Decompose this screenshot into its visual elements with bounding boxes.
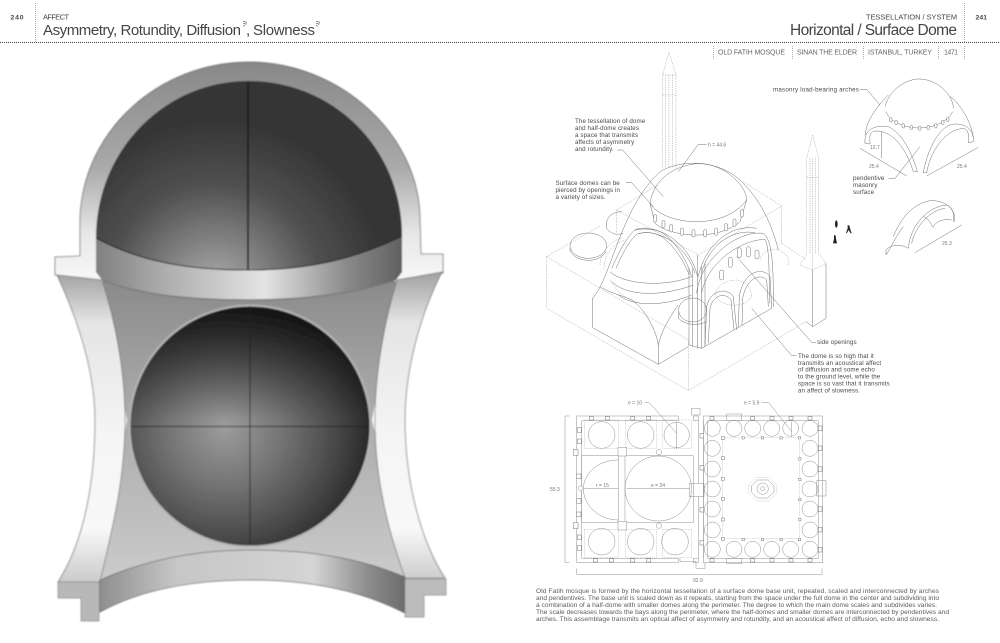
leader lines xyxy=(617,144,816,356)
lower band xyxy=(100,550,405,613)
left hall bays xyxy=(584,420,692,558)
human figures xyxy=(833,220,852,243)
illustration: dome base unit xyxy=(860,79,978,255)
body paragraph: a combination of a half-dome with smaller domes along the perimeter. The degree to which the main dome scales and subdivides varies. xyxy=(536,602,937,609)
page header xyxy=(0,3,1000,60)
building metadata row: ISTANBUL, TURKEY xyxy=(868,50,932,56)
building metadata row: OLD FATIH MOSQUE xyxy=(718,50,785,56)
annotation: tessellation: and rotundity. xyxy=(575,146,614,153)
annotation: surface domes: pierced by openings in xyxy=(556,187,620,194)
body paragraph xyxy=(536,588,949,623)
annotation: tessellation: a space that transmits xyxy=(575,132,638,139)
half dome interior xyxy=(96,81,402,270)
body paragraph: The scale decreases towards the bays along the perimeter, where the half-domes and smaller domes are interconnected by pendentives and xyxy=(536,609,949,616)
left section label: AFFECT xyxy=(43,12,69,22)
base block dashed outline xyxy=(547,182,807,391)
half dome seam xyxy=(247,81,249,270)
courtyard outline xyxy=(722,438,799,538)
central dome and half dome xyxy=(578,422,692,530)
right title: Horizontal / Surface Dome xyxy=(790,22,957,39)
main dome and drum xyxy=(650,163,747,237)
dimensions: base unit xyxy=(869,145,967,247)
right foot xyxy=(405,579,446,617)
dimensions: floor plan: r = 15 xyxy=(596,483,609,489)
annotation: pendentive surface: masonry xyxy=(853,182,878,189)
annotation: surface domes: Surface domes can be xyxy=(556,180,620,187)
small perimeter domes xyxy=(570,212,789,324)
dimensions: floor plan: 55.3 xyxy=(550,487,560,493)
annotation: side openings: side openings xyxy=(817,339,857,346)
courtyard domes xyxy=(704,420,818,557)
left hall domes xyxy=(588,422,689,555)
right pier xyxy=(375,272,445,578)
central dome circle xyxy=(130,306,370,546)
right section label: TESSELLATION / SYSTEM xyxy=(866,12,957,22)
annotation: acoustics: The dome is so high that it xyxy=(798,353,874,360)
annotation: tessellation: affects of asymmetry xyxy=(575,139,635,146)
right minaret xyxy=(800,135,826,327)
supporting arches xyxy=(865,95,973,173)
half dome base band xyxy=(96,236,402,300)
dimensions: floor plan: e = 10 xyxy=(628,400,642,406)
dimensions: base unit: 25.4 xyxy=(957,164,967,170)
annotation: acoustics: to the ground level, while the xyxy=(798,374,881,380)
dome xyxy=(885,79,953,128)
dimensions: floor plan: e = 24 xyxy=(651,483,665,489)
dimensions: floor plan: 92.9 xyxy=(693,578,703,584)
ground plane lines xyxy=(860,89,978,178)
illustration: axonometric drawing of the mosque xyxy=(547,52,852,391)
annotation: acoustics: an affect of slowness. xyxy=(798,388,860,394)
columns xyxy=(573,417,822,562)
pendentive surface xyxy=(100,278,408,578)
upper arch frame xyxy=(55,62,443,282)
left title: Asymmetry, Rotundity, Diffusion xyxy=(43,22,241,39)
annotation: acoustics: space is so vast that it transmits xyxy=(798,380,890,388)
right wing with side arches xyxy=(697,233,773,345)
annotation: tessellation: and half-dome creates xyxy=(575,125,639,132)
dimensions: floor plan: e = 5.9 xyxy=(744,400,760,406)
dimensions: floor plan xyxy=(550,400,760,584)
dimensions: base unit: 12.7 xyxy=(870,145,880,151)
left page number: 240 xyxy=(10,14,24,22)
left title: , xyxy=(246,22,250,39)
drum windows xyxy=(890,117,949,130)
annotation: acoustics: transmits an acoustical affect xyxy=(798,360,881,367)
annotation: pendentive surface: pendentive xyxy=(853,175,885,182)
body paragraph: arches. This assemblage transmits an optical affect of asymmetry and rotundity, and an acoustical affect of diffusion, echo and slowness. xyxy=(536,616,939,623)
left foot xyxy=(58,582,99,621)
right page number: 241 xyxy=(976,14,987,22)
body paragraph: and pendentives. The base unit is scaled down as it repeats, starting from the space under the full dome in the center and subdividing into xyxy=(536,595,939,602)
left title xyxy=(43,21,320,39)
building metadata row: 1471 xyxy=(944,50,958,56)
courtyard fountain xyxy=(749,477,777,501)
central pier lines xyxy=(689,255,772,348)
illustration: rendered dome unit interior view xyxy=(55,62,446,621)
body paragraph: Old Fatih mosque is formed by the horizontal tessellation of a surface dome base unit, repeated, scaled and interconnected by arches xyxy=(536,588,940,595)
big load-bearing arches xyxy=(593,163,778,298)
illustration: floor plan xyxy=(565,403,826,574)
left pier xyxy=(57,275,125,582)
half dome xyxy=(600,229,693,304)
annotation: acoustics: of diffusion and some echo xyxy=(798,366,875,374)
walls xyxy=(577,416,823,563)
pendentive fragment xyxy=(886,201,962,255)
dimension: dome height: h = 44.6 xyxy=(708,142,726,148)
building metadata row: SINAN THE ELDER xyxy=(797,50,857,56)
left title: Slowness xyxy=(253,22,315,39)
building metadata row xyxy=(718,50,958,56)
annotation: pendentive surface: surface xyxy=(853,189,875,196)
left minaret xyxy=(663,52,676,168)
dimensions: base unit: 25.4 xyxy=(869,164,879,170)
dimensions: base unit: 25.3 xyxy=(942,241,952,247)
dimension lines xyxy=(565,403,822,574)
annotation: surface domes: a variety of sizes. xyxy=(556,194,606,201)
front block xyxy=(593,287,688,364)
portals xyxy=(680,408,826,568)
annotation: tessellation: The tessellation of dome xyxy=(575,118,646,125)
annotation: load-bearing arches: masonry load-bearing arches xyxy=(773,86,859,94)
